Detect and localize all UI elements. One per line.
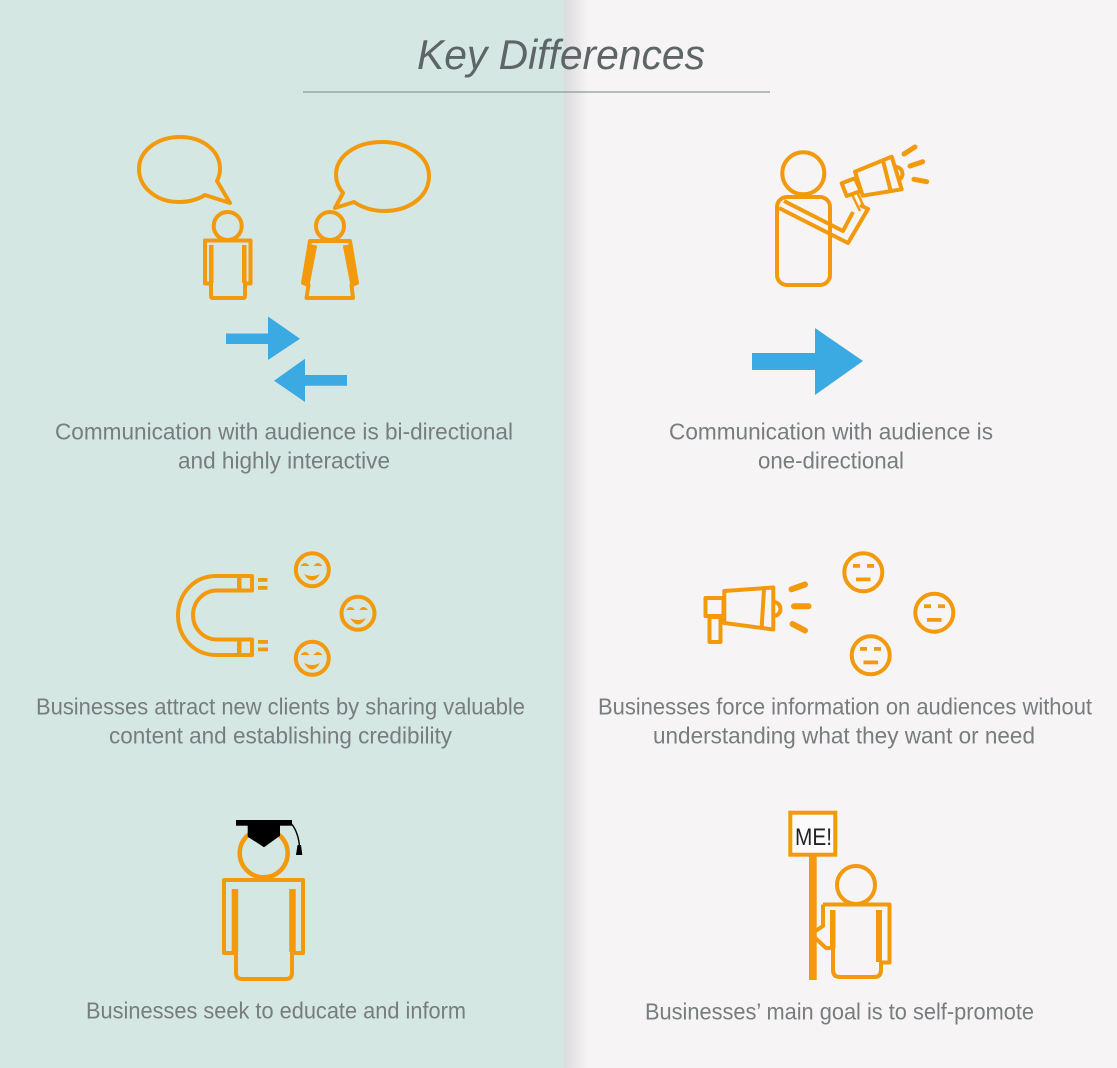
text: attract new clients: content and establishing credibility [109,722,452,748]
text: force information: Businesses force information on audiences without [598,694,1093,720]
icon: magnet attracting happy faces [178,553,374,675]
arrow: right, bi-directional [226,316,300,360]
text: force information [598,694,1093,748]
text: attract new clients [36,694,525,748]
title: Key Differences [417,31,705,78]
text: self-promote: Businesses’ main goal is to self-promote [645,998,1034,1024]
icon: megaphone aimed at neutral faces [706,553,953,674]
text: bi-directional communication: and highly interactive [178,448,390,474]
arrow: left, bi-directional [274,359,347,402]
icon: person holding ME! sign [790,813,890,980]
icon: person with megaphone [777,147,927,285]
text: force information: understanding what they want or need [653,722,1035,748]
icon: two people talking [139,137,429,298]
text: attract new clients: Businesses attract new clients by sharing valuable [36,694,525,720]
text: one-directional communication: one-directional [758,448,904,474]
icon: person holding ME! sign: ME! [795,824,832,851]
arrow: one-directional [752,328,863,395]
panel: left column background [0,0,564,1068]
panel: right column background [564,0,1117,1068]
text: bi-directional communication: Communication with audience is bi-directional [55,418,513,444]
text: one-directional communication [669,418,993,474]
text: bi-directional communication [55,418,513,474]
text: one-directional communication: Communication with audience is [669,418,993,444]
icon: graduate person [224,820,303,979]
text: educate and inform: Businesses seek to educate and inform [86,998,466,1024]
